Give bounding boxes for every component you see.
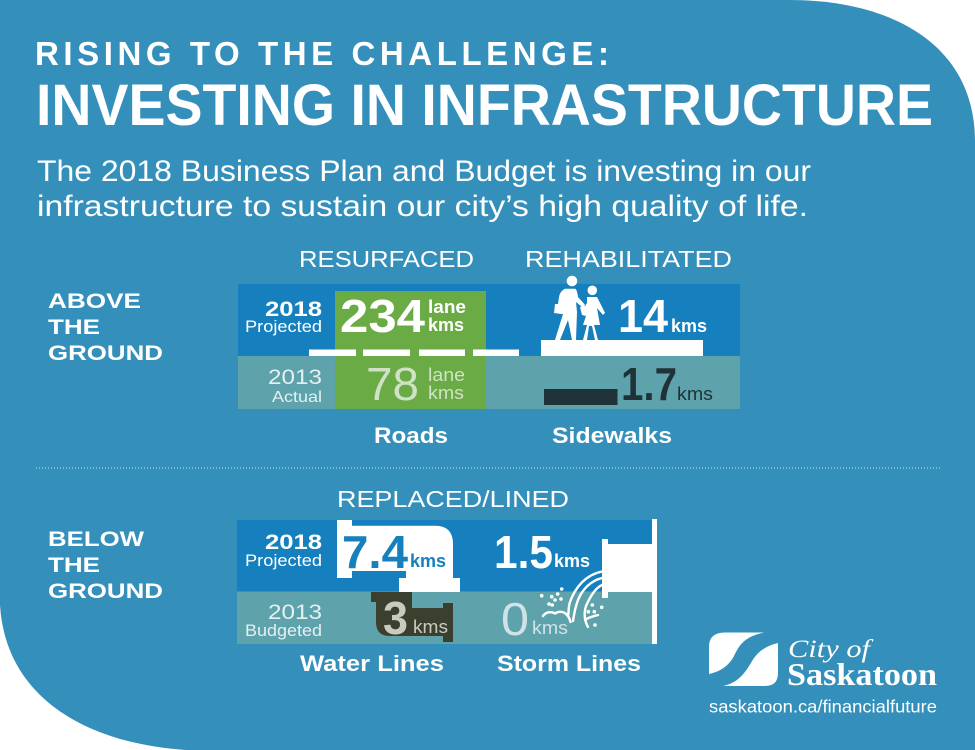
- row label: 2013 actual: 2013: [268, 366, 322, 389]
- stat: 14 kms: kms: [671, 316, 707, 336]
- title: INVESTING IN INFRASTRUCTURE: [36, 73, 933, 138]
- panel: above the ground chart: [238, 276, 740, 410]
- stat: 78 lane kms: [366, 358, 465, 410]
- stat: 78 lane kms: 78: [366, 358, 419, 410]
- stat: 7.4 kms: kms: [410, 551, 446, 571]
- column label: sidewalks: Sidewalks: [552, 423, 672, 448]
- row label: 2018 projected: [245, 531, 322, 570]
- stat: 3 kms: 3: [383, 592, 408, 644]
- row background: 2013: [237, 592, 653, 644]
- stat: 234 lane kms: lane: [428, 297, 466, 317]
- icon: water spray: [540, 572, 604, 627]
- stat: 1.5 kms: [494, 526, 590, 578]
- column label: water lines: Water Lines: [300, 651, 444, 676]
- stat: 234 lane kms: 234: [340, 290, 425, 342]
- icon: water pipe 2013: [371, 592, 453, 642]
- row label: 2018 projected: Projected: [245, 317, 322, 336]
- logo: City of Saskatoon: [709, 632, 937, 716]
- intro text: infrastructure to sustain our city’s high quality of life.: [37, 190, 808, 223]
- section label: below the ground: GROUND: [48, 579, 163, 603]
- sidewalk slab 2018: [541, 340, 703, 356]
- row label: 2013 actual: [268, 366, 322, 406]
- section label: below the ground: BELOW: [48, 527, 145, 551]
- stat: 0 kms: 0: [501, 593, 529, 645]
- stat: 3 kms: [383, 592, 448, 644]
- logo wordmark: Saskatoon: [787, 656, 937, 692]
- icon: pedestrians: [554, 276, 605, 340]
- column label: roads: Roads: [374, 423, 448, 448]
- row background: 2018: [238, 284, 740, 356]
- stat: 234 lane kms: [340, 290, 466, 342]
- section label: below the ground: [48, 527, 163, 603]
- row label: 2013 budgeted: 2013: [268, 601, 322, 624]
- row background: 2013: [238, 356, 740, 409]
- section label: above the ground: ABOVE: [48, 289, 141, 313]
- stat: 1.5 kms: 1.5: [494, 526, 553, 578]
- section label: below the ground: THE: [48, 553, 100, 577]
- row label: 2018 projected: [245, 298, 322, 336]
- column heading: rehabilitated: REHABILITATED: [525, 246, 732, 272]
- sidewalk slab 2013: [544, 389, 618, 405]
- section label: above the ground: THE: [48, 315, 100, 339]
- column heading: resurfaced: RESURFACED: [299, 246, 474, 272]
- stat: 1.7 kms: [621, 358, 713, 410]
- icon: water pipe 2018: [337, 520, 460, 592]
- road surface: [335, 291, 486, 409]
- row label: 2013 actual: Actual: [272, 389, 322, 406]
- stat: 1.7 kms: kms: [677, 384, 713, 404]
- title: RISING TO THE CHALLENGE:: [35, 35, 609, 72]
- column heading: replaced/lined: REPLACED/LINED: [337, 486, 569, 512]
- column label: storm lines: Storm Lines: [497, 651, 641, 676]
- stat: 0 kms: [501, 593, 568, 645]
- panel: below the ground chart: [237, 519, 657, 645]
- icon: storm outfall pipe: [602, 519, 657, 644]
- website url: saskatoon.ca/financialfuture: [709, 696, 937, 716]
- stat: 78 lane kms: kms: [428, 383, 464, 403]
- section label: above the ground: GROUND: [48, 341, 163, 365]
- stat: 78 lane kms: lane: [428, 365, 465, 385]
- logo wordmark: [787, 636, 937, 692]
- stat: 0 kms: kms: [532, 618, 568, 638]
- row label: 2018 projected: 2018: [265, 531, 322, 554]
- stat: 14 kms: 14: [618, 290, 668, 342]
- row label: 2018 projected: Projected: [245, 551, 322, 570]
- section label: above the ground: [48, 289, 163, 365]
- road lane dashes: [309, 350, 519, 356]
- stat: 7.4 kms: [342, 526, 446, 578]
- logo mark: [709, 632, 778, 686]
- stat: 1.7 kms: 1.7: [621, 358, 677, 410]
- row background: 2018: [237, 520, 653, 592]
- stat: 3 kms: kms: [413, 617, 448, 637]
- row label: 2018 projected: 2018: [265, 298, 322, 321]
- title: [35, 35, 933, 138]
- stat: 1.5 kms: kms: [554, 551, 590, 571]
- intro text: [37, 155, 811, 223]
- row label: 2013 budgeted: Budgeted: [245, 622, 322, 640]
- intro text: The 2018 Business Plan and Budget is investing in our: [37, 155, 811, 188]
- row label: 2013 budgeted: [245, 601, 322, 640]
- logo wordmark: City of: [788, 636, 874, 663]
- stat: 234 lane kms: kms: [428, 315, 464, 335]
- stat: 14 kms: [618, 290, 707, 342]
- stat: 7.4 kms: 7.4: [342, 526, 408, 578]
